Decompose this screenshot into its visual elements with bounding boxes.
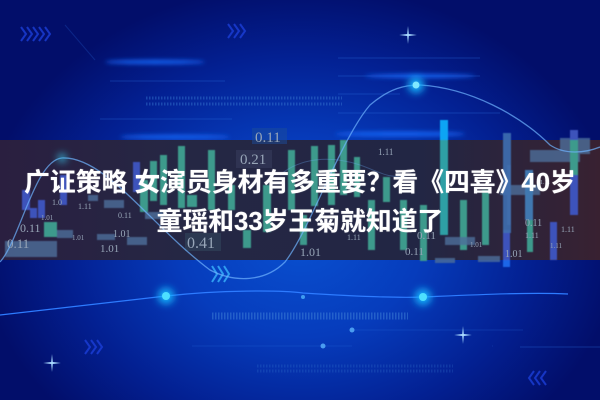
value labels: 1.01 xyxy=(113,229,130,240)
sparkles xyxy=(43,26,472,372)
value labels: 1.01 xyxy=(470,241,483,249)
value labels: 0.11 xyxy=(7,236,29,251)
value labels: 0.11 xyxy=(20,221,41,235)
value labels: 1.01 xyxy=(505,249,522,260)
value labels: 1.01 xyxy=(300,245,321,259)
value labels: 1.01 xyxy=(41,214,54,222)
value labels: 1.11 xyxy=(540,180,550,186)
value labels: 0.11 xyxy=(255,130,281,146)
value labels: 1.01 xyxy=(72,234,85,242)
title xyxy=(24,168,576,236)
value labels: 1.0 xyxy=(52,198,62,207)
value labels: 0.21 xyxy=(240,152,266,168)
value labels: 1.11 xyxy=(550,242,562,250)
bars and candlesticks xyxy=(5,120,590,267)
wave curves xyxy=(0,85,600,315)
value labels: 0.11 xyxy=(525,218,542,229)
glow nodes xyxy=(58,77,431,348)
value labels: 1.11 xyxy=(347,233,361,242)
value labels: 1.11 xyxy=(561,225,575,234)
chevrons xyxy=(21,24,546,385)
value labels: 0.11 xyxy=(118,211,132,220)
value labels: 0.11 xyxy=(417,230,436,242)
value labels: 1.11 xyxy=(78,202,92,211)
title band xyxy=(0,140,600,260)
value labels: 0.41 xyxy=(187,235,215,252)
title: 童瑶和33岁王菊就知道了 xyxy=(157,208,443,236)
value labels: 1.11 xyxy=(525,231,539,240)
value labels xyxy=(7,128,575,260)
value labels: 1.11 xyxy=(378,147,393,157)
glow streaks xyxy=(105,60,475,139)
value labels: 1.01 xyxy=(100,243,119,255)
value labels: 0.11 xyxy=(405,246,424,258)
binary pattern rows xyxy=(146,98,453,371)
title: 广证策略 女演员身材有多重要？看《四喜》40岁 xyxy=(24,169,576,197)
